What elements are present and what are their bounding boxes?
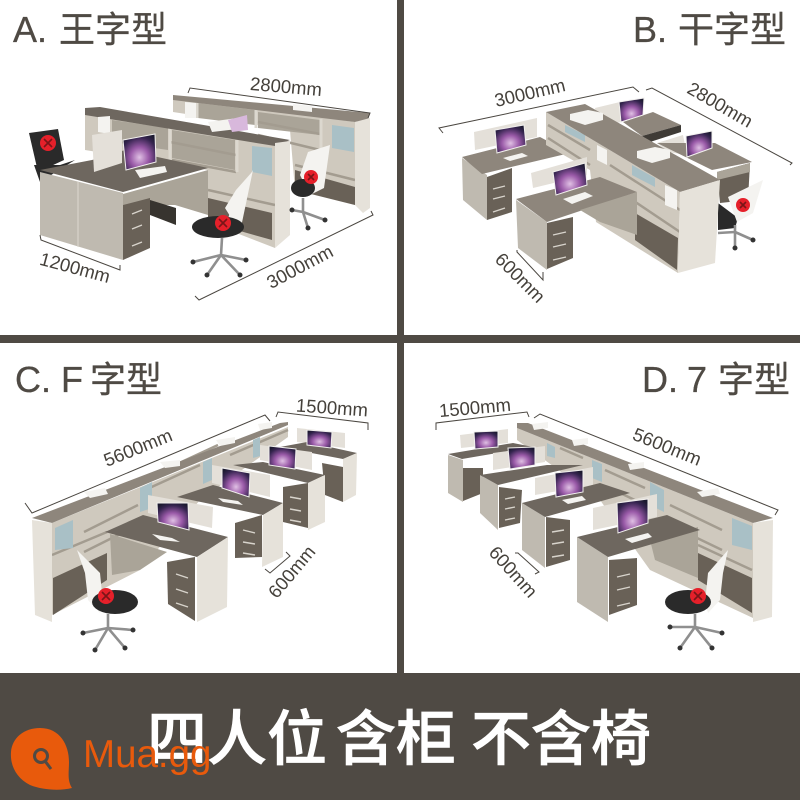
dimension: 600mm: 600mm <box>264 541 319 602</box>
shelf unit <box>546 104 720 273</box>
desk 1 <box>105 495 228 622</box>
printers <box>570 110 670 163</box>
chair <box>718 180 763 248</box>
dimension: 2800mm <box>188 73 370 118</box>
dimension: 1200mm <box>38 235 120 287</box>
desk <box>40 130 208 260</box>
dimension: 1500mm: 1500mm <box>295 395 369 420</box>
dimension: 3000mm: 3000mm <box>263 240 336 293</box>
footer band text: 四人位 <box>147 706 327 773</box>
heading: C: 字型 <box>90 359 162 400</box>
desk 2 <box>522 467 630 568</box>
rear cabinet <box>173 95 370 213</box>
heading: D: 7 <box>687 359 707 400</box>
dimension: 3000mm <box>439 74 639 133</box>
heading: C: C. <box>15 359 51 400</box>
heading: A: 王字型 <box>59 9 167 50</box>
heading: D: D. <box>642 359 678 400</box>
chair: right <box>291 145 330 228</box>
icon: orange search bubble <box>11 728 72 790</box>
panel: A layout <box>0 0 397 335</box>
desk 3 <box>233 445 325 530</box>
desk 2 <box>177 465 283 567</box>
front cabinet <box>85 107 290 248</box>
dimension: 1200mm: 1200mm <box>38 248 113 287</box>
chair: middle <box>192 170 253 275</box>
watermark: Mua.gg: Mua.gg <box>83 733 211 776</box>
panel: C layout <box>0 343 397 673</box>
desk 3 <box>480 446 583 530</box>
dimension: 5600mm: 5600mm <box>630 423 704 470</box>
right desk <box>657 131 752 203</box>
dimension: 2800mm: 2800mm <box>684 77 757 132</box>
watermark: Mua.gg <box>11 728 211 790</box>
back desk <box>595 98 681 142</box>
chair: left <box>29 129 75 182</box>
heading: A: A. <box>13 9 47 50</box>
chair <box>77 550 138 650</box>
desk 4 <box>448 429 533 502</box>
panel: D layout <box>404 343 800 673</box>
footer band text <box>147 706 651 773</box>
front desk <box>516 157 637 270</box>
dimension: 5600mm: 5600mm <box>101 424 175 471</box>
left desk <box>462 118 570 220</box>
dimension: 3000mm <box>195 211 373 300</box>
heading: B: 干字型 <box>678 9 786 50</box>
desk 1 <box>577 494 700 622</box>
dimension: 3000mm: 3000mm <box>492 74 567 111</box>
dimension: 1500mm <box>436 394 529 430</box>
footer band text: 含柜 <box>336 706 456 773</box>
dimension: 5600mm <box>25 415 270 513</box>
long shelf <box>517 422 773 622</box>
chair <box>665 550 728 648</box>
heading: C: F <box>61 359 83 400</box>
dimension: 2800mm <box>646 77 792 165</box>
desk 4 <box>280 428 357 502</box>
dimension: 5600mm <box>534 414 778 515</box>
dimension: 1500mm: 1500mm <box>438 394 512 421</box>
footer band text: 不含椅 <box>471 706 651 773</box>
dimension: 600mm: 600mm <box>485 542 542 602</box>
dimension: 600mm: 600mm <box>491 248 550 307</box>
dimension: 2800mm: 2800mm <box>249 73 323 100</box>
heading: D: 字型 <box>718 359 790 400</box>
long shelf <box>32 422 288 622</box>
heading: B: B. <box>633 9 667 50</box>
privacy panel and monitor <box>92 130 167 178</box>
dimension: 1500mm <box>276 395 369 430</box>
panel: B layout <box>404 0 800 335</box>
